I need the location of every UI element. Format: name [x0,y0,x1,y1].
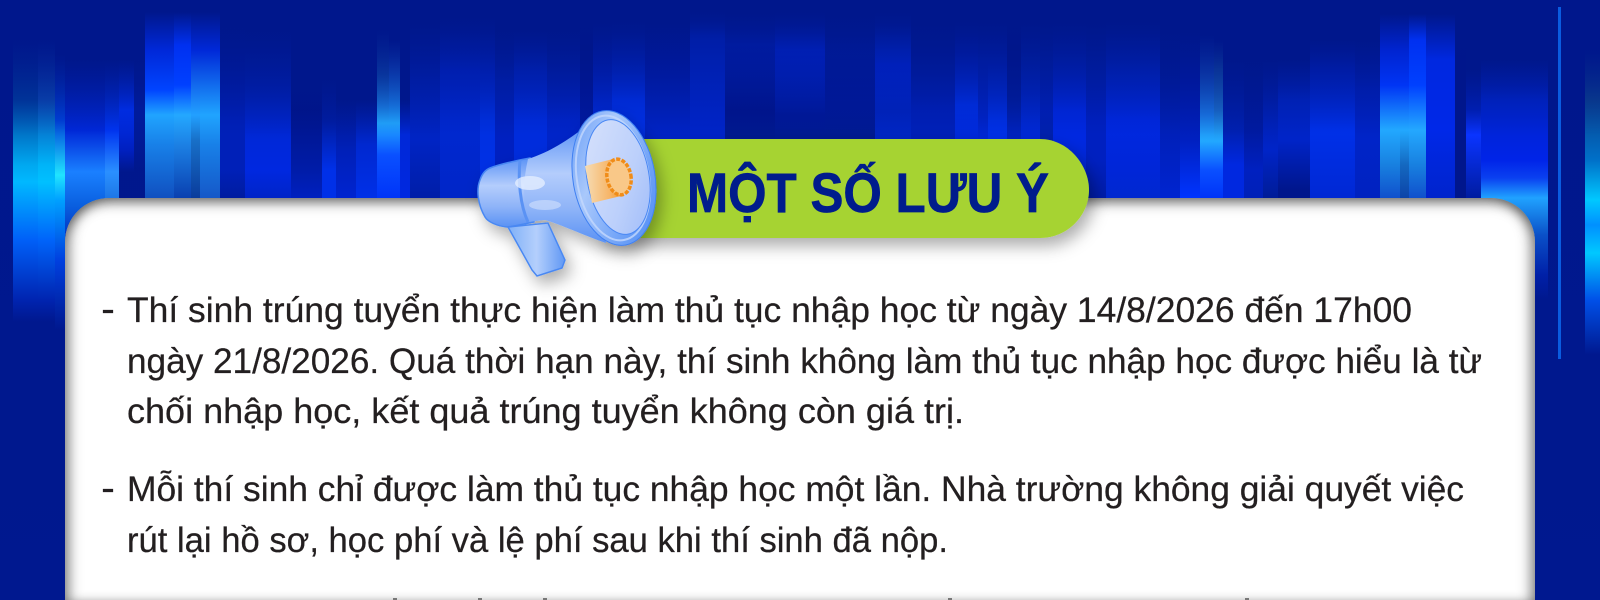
megaphone handle [508,223,565,276]
note 1: ngày 21/8/2026. Quá thời hạn này, thí sinh không làm thủ tục nhập học được hiểu là từ [127,342,1482,381]
heading pill [600,139,1089,238]
note 2: Mỗi thí sinh chỉ được làm thủ tục nhập học một lần. Nhà trường không giải quyết việc [127,470,1464,509]
panel: white notes card [65,198,1535,600]
note 2: rút lại hồ sơ, học phí và lệ phí sau khi thí sinh đã nộp. [127,521,948,560]
note 1: chối nhập học, kết quả trúng tuyển không còn giá trị. [127,392,964,431]
megaphone cone [524,127,606,243]
notes text [103,291,1482,560]
note 1: Thí sinh trúng tuyển thực hiện làm thủ tục nhập học từ ngày 14/8/2026 đến 17h00 [127,291,1412,330]
note 2 [103,470,1464,560]
megaphone rear section [478,158,534,227]
megaphone bell inside [577,114,659,240]
note 1 [103,291,1482,431]
megaphone orange driver [585,157,634,203]
icon: blue megaphone [478,104,666,276]
megaphone bell rim [562,104,666,252]
heading text: MỘT SỐ LƯU Ý [687,161,1049,224]
